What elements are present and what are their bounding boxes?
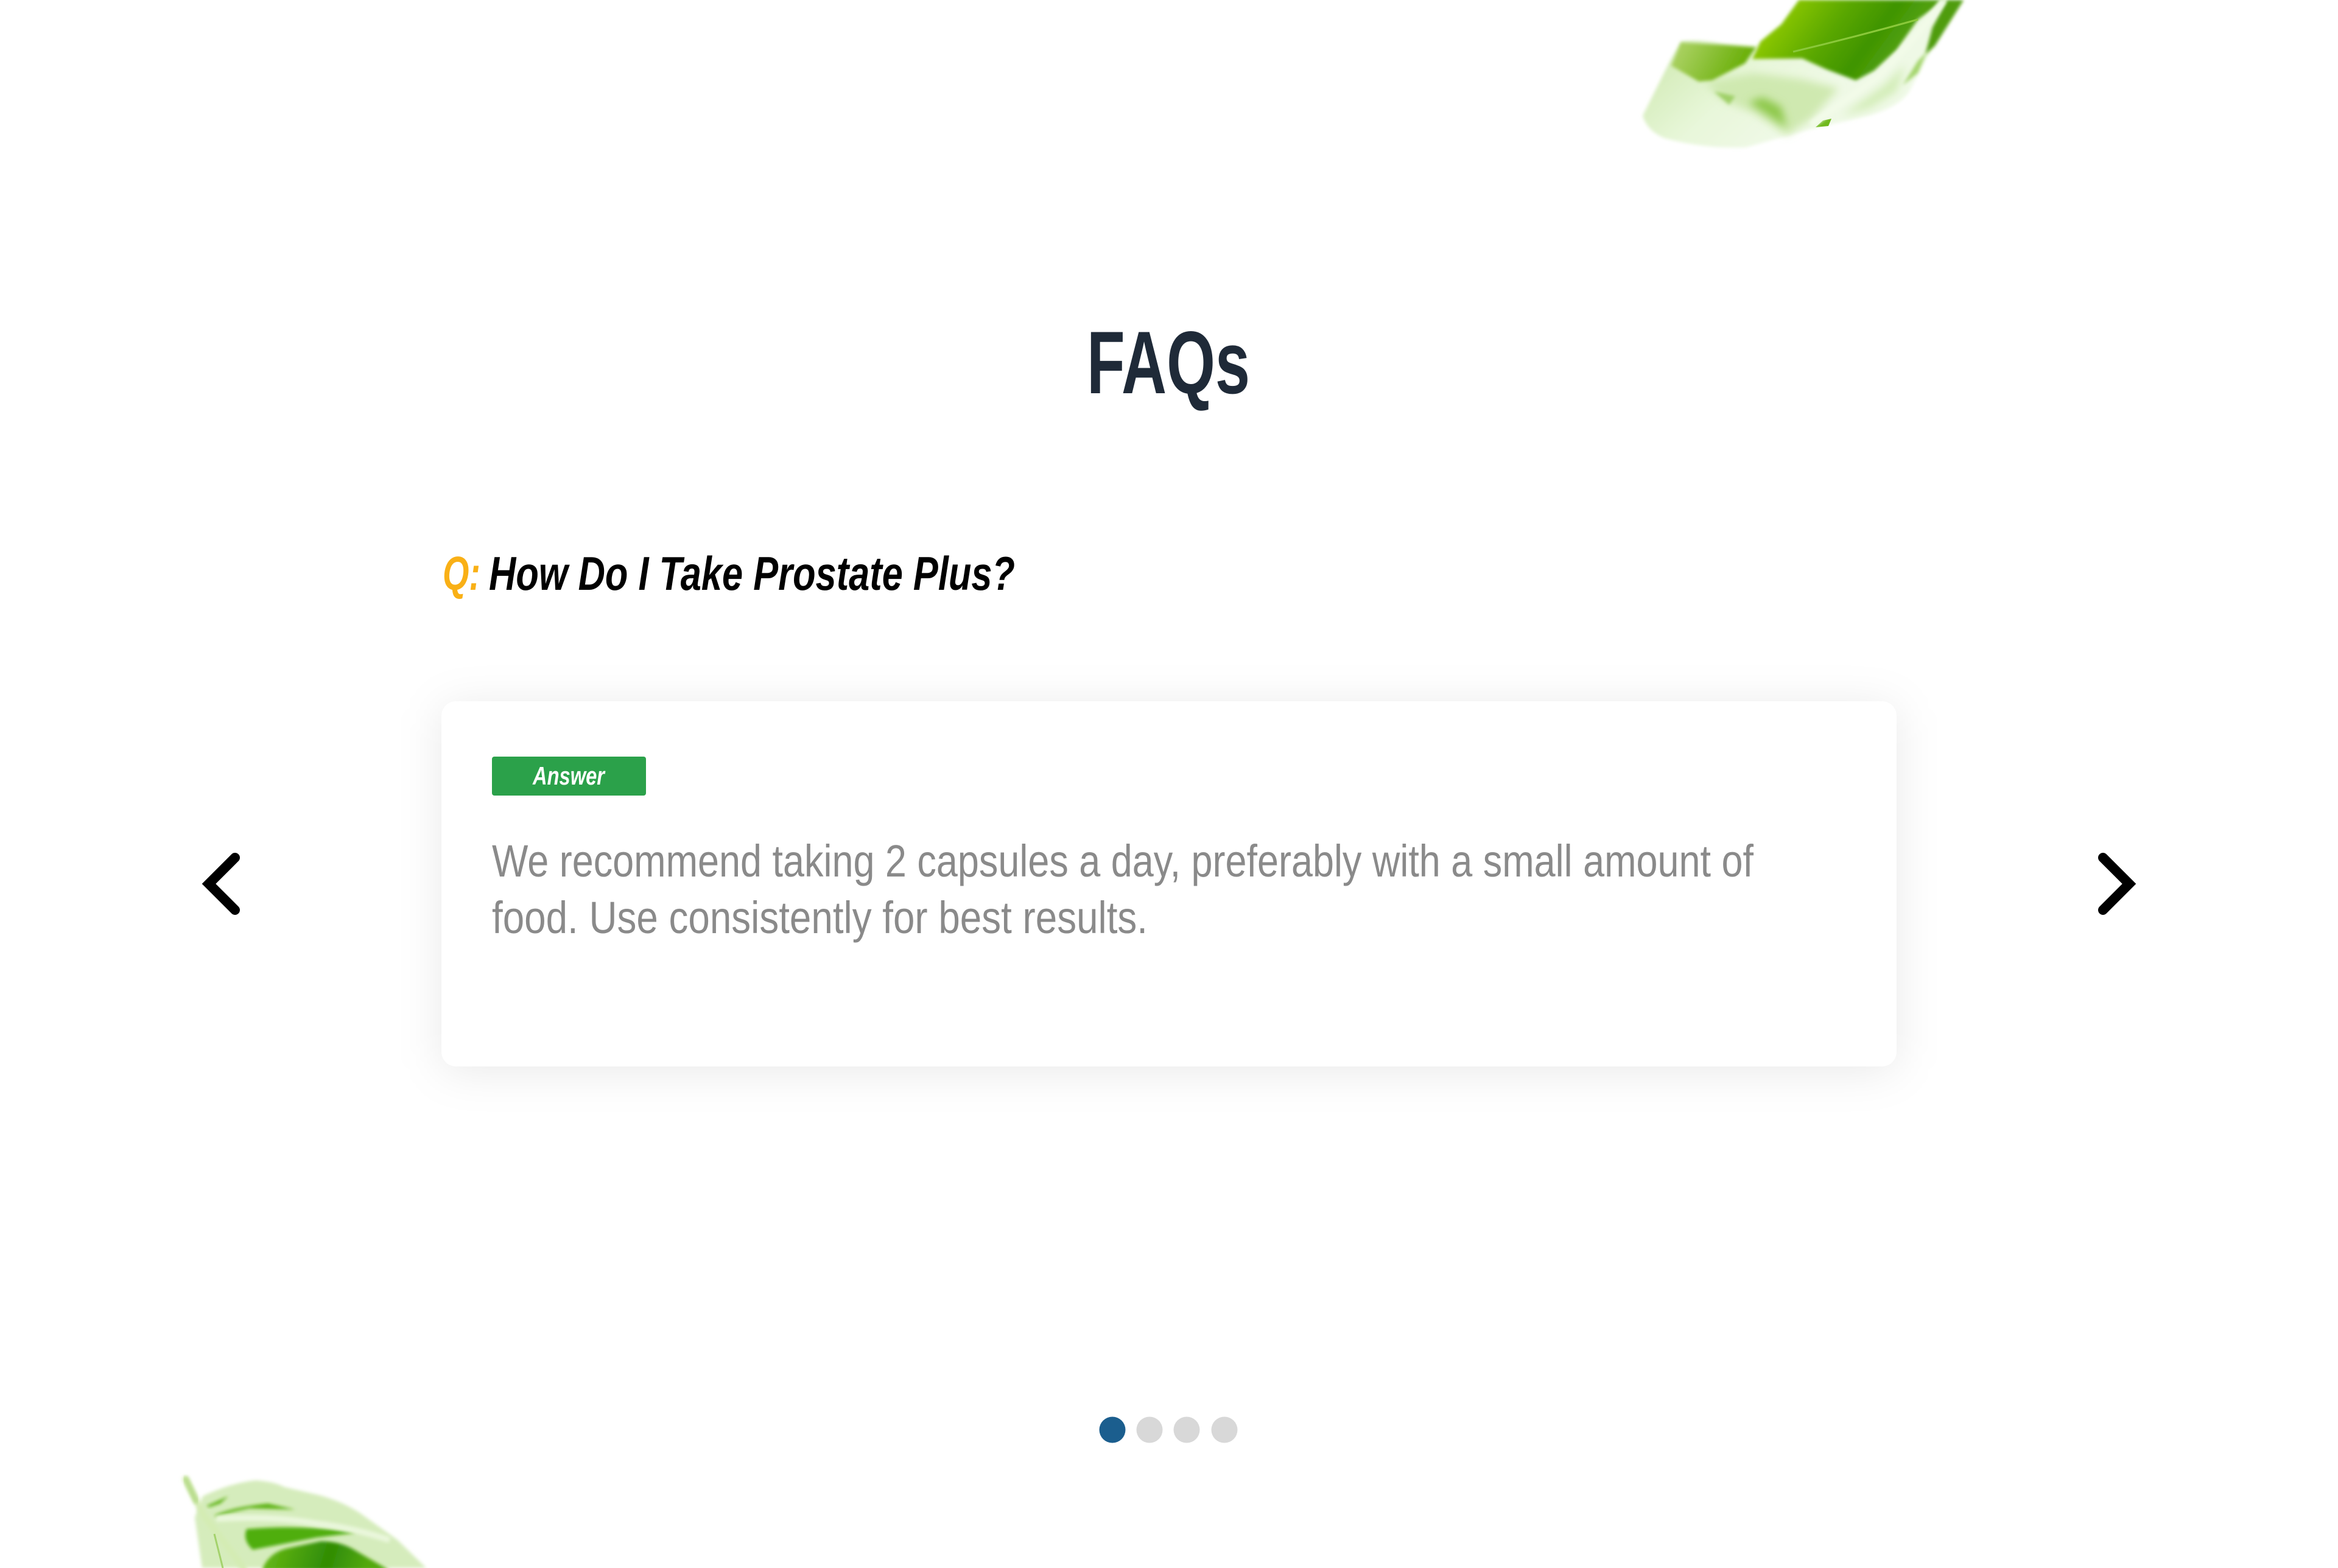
question heading: How Do I Take Prostate Plus? (489, 547, 1015, 600)
question heading: Q: (443, 547, 480, 600)
answer badge: Answer (532, 761, 606, 790)
arrow: previous (209, 858, 235, 910)
icon: basil leaf top right (1643, 0, 1964, 147)
panel: answer card (441, 701, 1897, 1071)
pagination dots (1100, 1417, 1237, 1443)
answer text: food. Use consistently for best results. (492, 892, 1148, 943)
arrow: next (2103, 858, 2129, 910)
answer badge (492, 757, 646, 796)
icon: basil leaf bottom left (186, 1479, 426, 1568)
answer text (492, 836, 1754, 943)
title: FAQs (1087, 313, 1250, 412)
answer text: We recommend taking 2 capsules a day, preferably with a small amount of (492, 836, 1754, 886)
